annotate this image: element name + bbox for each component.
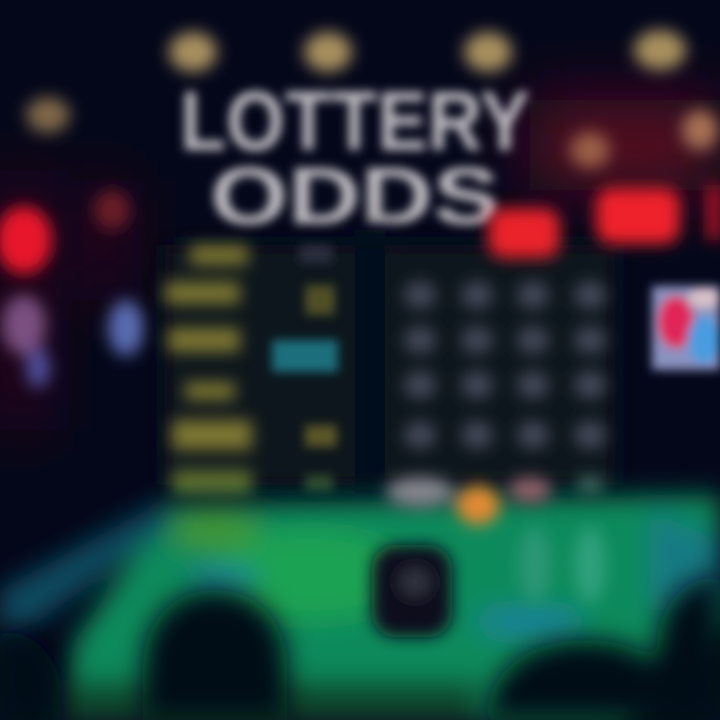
left side lights xyxy=(2,295,144,388)
ceiling lights xyxy=(26,30,718,230)
red stage glow xyxy=(0,100,720,430)
audience silhouettes xyxy=(0,575,720,720)
yellow name column xyxy=(165,245,252,494)
center figure silhouette xyxy=(372,545,452,637)
second column xyxy=(272,245,338,491)
red neon panels xyxy=(0,185,720,274)
green table xyxy=(0,495,720,720)
table chips row xyxy=(386,476,606,603)
title: lottery odds xyxy=(180,74,530,242)
title: lottery odds: ODDS xyxy=(210,151,500,242)
side screen xyxy=(652,286,720,370)
title: lottery odds: LOTTERY xyxy=(180,74,530,168)
number grid xyxy=(404,281,606,449)
results board panel xyxy=(165,230,615,490)
